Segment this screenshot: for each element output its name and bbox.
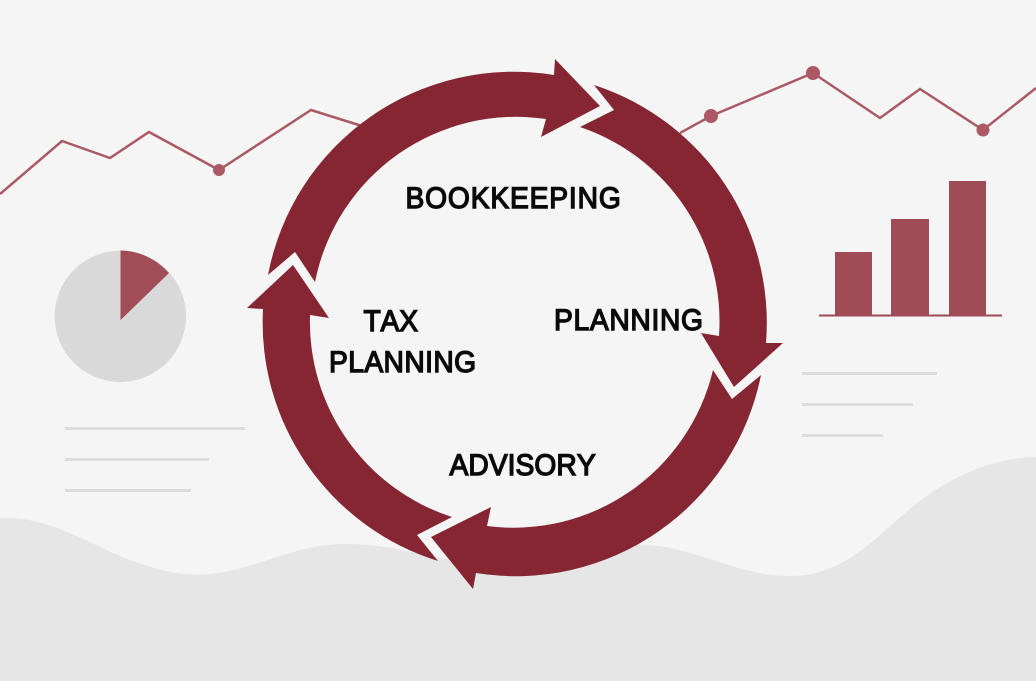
right placeholder text lines bbox=[802, 372, 937, 437]
background wave bbox=[0, 457, 1036, 681]
left line chart bbox=[0, 110, 362, 194]
right line chart bbox=[680, 66, 1036, 136]
label: tax planning bbox=[329, 305, 476, 379]
arrow: bottom right segment bbox=[431, 370, 761, 589]
cycle arrows bbox=[247, 59, 783, 589]
label: tax planning: PLANNING bbox=[329, 346, 476, 379]
arrow: top left segment bbox=[268, 59, 600, 282]
left placeholder text lines bbox=[65, 427, 245, 492]
arrow: bottom left segment bbox=[247, 265, 452, 561]
label: advisory: ADVISORY bbox=[450, 449, 596, 482]
label: planning: PLANNING bbox=[554, 304, 703, 337]
label: tax planning: TAX bbox=[364, 305, 418, 338]
label: bookkeeping: BOOKKEEPING bbox=[406, 182, 621, 215]
bar chart bbox=[819, 181, 1002, 316]
pie chart bbox=[55, 250, 186, 382]
arrow: top right segment bbox=[580, 85, 783, 387]
